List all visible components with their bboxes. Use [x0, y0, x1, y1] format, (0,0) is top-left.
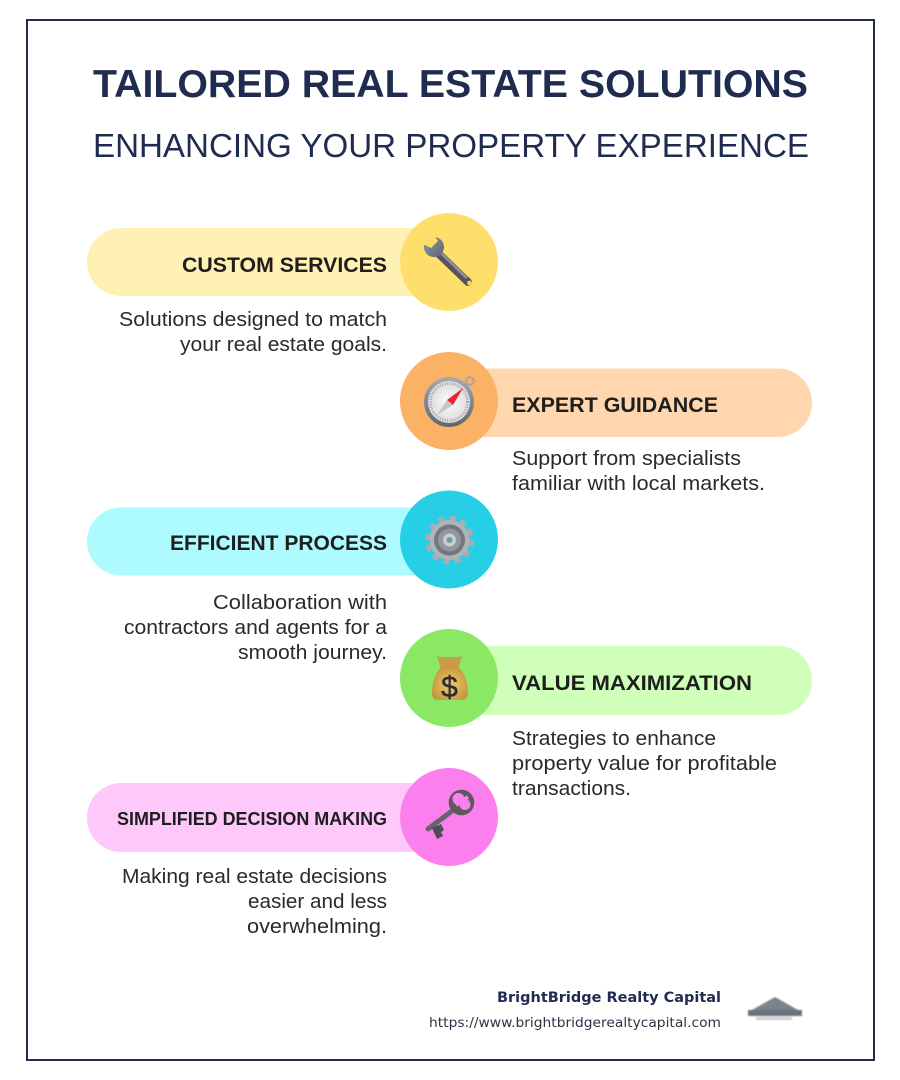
description	[512, 448, 765, 495]
heading: EFFICIENT PROCESS	[170, 532, 387, 555]
icon circle	[400, 213, 498, 311]
footer: brand	[429, 990, 721, 1031]
label pill	[442, 646, 812, 715]
panel: value maximization	[400, 629, 812, 800]
description: transactions.	[512, 778, 631, 800]
icon circle	[400, 352, 498, 450]
label pill	[87, 228, 457, 296]
heading: EXPERT GUIDANCE	[512, 394, 718, 417]
label pill	[442, 368, 812, 437]
description: easier and less	[248, 891, 387, 913]
description	[119, 309, 387, 356]
description: Solutions designed to match	[119, 309, 387, 331]
description: familiar with local markets.	[512, 473, 765, 495]
label pill	[87, 783, 457, 852]
subtitle: ENHANCING YOUR PROPERTY EXPERIENCE	[93, 127, 809, 164]
icon: money bag	[432, 656, 468, 704]
icon circle	[400, 768, 498, 866]
panel: custom services	[87, 213, 498, 356]
description: overwhelming.	[247, 916, 387, 938]
logo	[748, 997, 802, 1020]
icon: key	[428, 790, 474, 839]
label pill	[87, 508, 457, 576]
description: smooth journey.	[238, 642, 387, 664]
icon: compass	[424, 377, 474, 427]
description: property value for profitable	[512, 753, 777, 775]
heading: VALUE MAXIMIZATION	[512, 672, 752, 695]
description: Making real estate decisions	[122, 866, 387, 888]
description	[512, 728, 777, 800]
description	[122, 866, 387, 938]
icon: wrench	[423, 234, 472, 285]
description: Support from specialists	[512, 448, 741, 470]
website url: https://www.brightbridgerealtycapital.com	[429, 1016, 721, 1031]
description: your real estate goals.	[180, 334, 387, 356]
icon: money bag: $	[441, 671, 458, 704]
panel: simplified decision making	[87, 768, 498, 938]
icon circle	[400, 490, 498, 588]
description: Strategies to enhance	[512, 728, 716, 750]
description: Collaboration with	[213, 592, 387, 614]
description: contractors and agents for a	[124, 617, 388, 639]
panel: efficient process	[87, 490, 498, 664]
title: TAILORED REAL ESTATE SOLUTIONS	[93, 63, 808, 106]
panel: expert guidance	[400, 352, 812, 495]
heading: CUSTOM SERVICES	[182, 254, 387, 277]
icon circle	[400, 629, 498, 727]
icon: gear	[428, 519, 470, 561]
company name: BrightBridge Realty Capital	[497, 990, 721, 1006]
heading: SIMPLIFIED DECISION MAKING	[117, 809, 387, 829]
description	[124, 592, 388, 664]
